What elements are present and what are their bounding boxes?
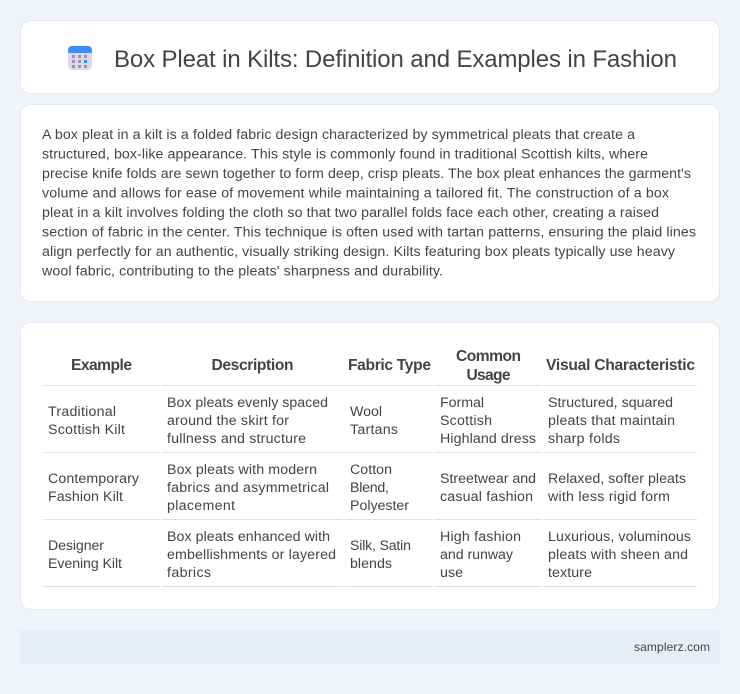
table row: Contemporary Fashion Kilt [43,462,697,520]
table row: Contemporary Fashion Kilt: Polyester [350,498,409,514]
text block: description paragraph: wool fabric, contributing to the pleats' sharpness and durability. [41,264,443,280]
table row: Traditional Scottish Kilt: Formal [440,395,484,411]
icon: calendar [68,46,92,70]
table row: Traditional Scottish Kilt: around the skirt for [167,413,289,429]
footer text: source: samplerz.com [634,640,710,654]
table row: Traditional Scottish Kilt [43,395,697,452]
table row: Traditional Scottish Kilt: Box pleats evenly spaced [167,395,328,411]
title: Box Pleat in Kilts: Definition and Examples in Fashion [114,46,677,73]
table row: Traditional Scottish Kilt: sharp folds [548,431,620,447]
table row: Contemporary Fashion Kilt: fabrics and asymmetrical [167,480,329,496]
table row: Designer Evening Kilt: blends [350,556,392,572]
table row: Traditional Scottish Kilt: Structured, squared [548,395,673,411]
table row: Contemporary Fashion Kilt: Blend, [350,480,389,496]
text block: description paragraph: structured, box-like appearance. This style is commonly found in traditional Scottish kilts, where [42,146,648,162]
table row: Traditional Scottish Kilt: Traditional [48,404,116,420]
text block: description paragraph: pleat in a kilt involves folding the cloth so that two parallel folds face each other, creating a raised [42,205,659,221]
table row: Contemporary Fashion Kilt: Fashion Kilt [48,489,123,505]
table row: Contemporary Fashion Kilt: Box pleats with modern [167,462,317,478]
table header row [43,348,697,386]
table row: Designer Evening Kilt: Silk, Satin [350,538,411,554]
table row: Traditional Scottish Kilt: Wool [350,404,382,420]
table row: Designer Evening Kilt: use [440,565,463,581]
table row: Designer Evening Kilt: High fashion [440,529,521,545]
table row: Designer Evening Kilt [43,529,697,586]
table row: Designer Evening Kilt: embellishments or layered [167,547,336,563]
text block: description paragraph: precise knife folds are sewn together to form deep, crisp pleats. The box pleat enhances the garment's [42,166,691,182]
panel: title card [20,20,720,94]
table row: Designer Evening Kilt: Evening Kilt [48,556,122,572]
table row: Contemporary Fashion Kilt: Streetwear and [440,471,536,487]
table row: Traditional Scottish Kilt: Highland dress [440,431,536,447]
text block: description paragraph [41,127,696,280]
footer bar [20,630,720,664]
table row: Designer Evening Kilt: texture [548,565,592,581]
table row: Designer Evening Kilt: pleats with sheen and [548,547,688,563]
table row: Contemporary Fashion Kilt: placement [167,498,235,514]
table row: Designer Evening Kilt: Designer [48,538,104,554]
text block: description paragraph: volume and allows for ease of movement while maintaining a tailored fit. The construction of a box [42,186,669,202]
table: kilt examples [43,348,697,586]
table row: Contemporary Fashion Kilt: Contemporary [48,471,140,487]
table row: Traditional Scottish Kilt: Tartans [350,422,398,438]
table header row: Example [71,357,132,374]
text block: description paragraph: section of fabric in the center. This technique is often used with tartan patterns, ensuring the plaid lines [42,224,696,240]
table row: Traditional Scottish Kilt: Scottish Kilt [48,422,125,438]
table header row: Visual Characteristic [546,357,695,374]
table row: Designer Evening Kilt: and runway [440,547,514,563]
text block: description paragraph: align perfectly for an authentic, visually striking design. Kilts featuring box pleats typically use heavy [42,244,676,260]
table row: Contemporary Fashion Kilt: Relaxed, softer pleats [548,471,686,487]
panel: table card [20,322,720,610]
panel: description [20,104,720,302]
table header row: Common [456,348,521,365]
table header row: Usage [466,367,511,384]
table row: Designer Evening Kilt: Luxurious, voluminous [548,529,691,545]
table row: Designer Evening Kilt: fabrics [167,565,211,581]
table row: Traditional Scottish Kilt: Scottish [440,413,492,429]
table row: Traditional Scottish Kilt: fullness and structure [167,431,306,447]
table row: Traditional Scottish Kilt: pleats that maintain [548,413,675,429]
table row: Designer Evening Kilt: Box pleats enhanced with [167,529,330,545]
table row: Contemporary Fashion Kilt: Cotton [350,462,392,478]
table header row: Fabric Type [348,357,431,374]
table header row: Description [212,357,294,374]
table row: Contemporary Fashion Kilt: with less rigid form [547,489,670,505]
table row: Contemporary Fashion Kilt: casual fashion [440,489,533,505]
text block: description paragraph: A box pleat in a kilt is a folded fabric design characterized by symmetrical pleats that create a [42,127,635,143]
